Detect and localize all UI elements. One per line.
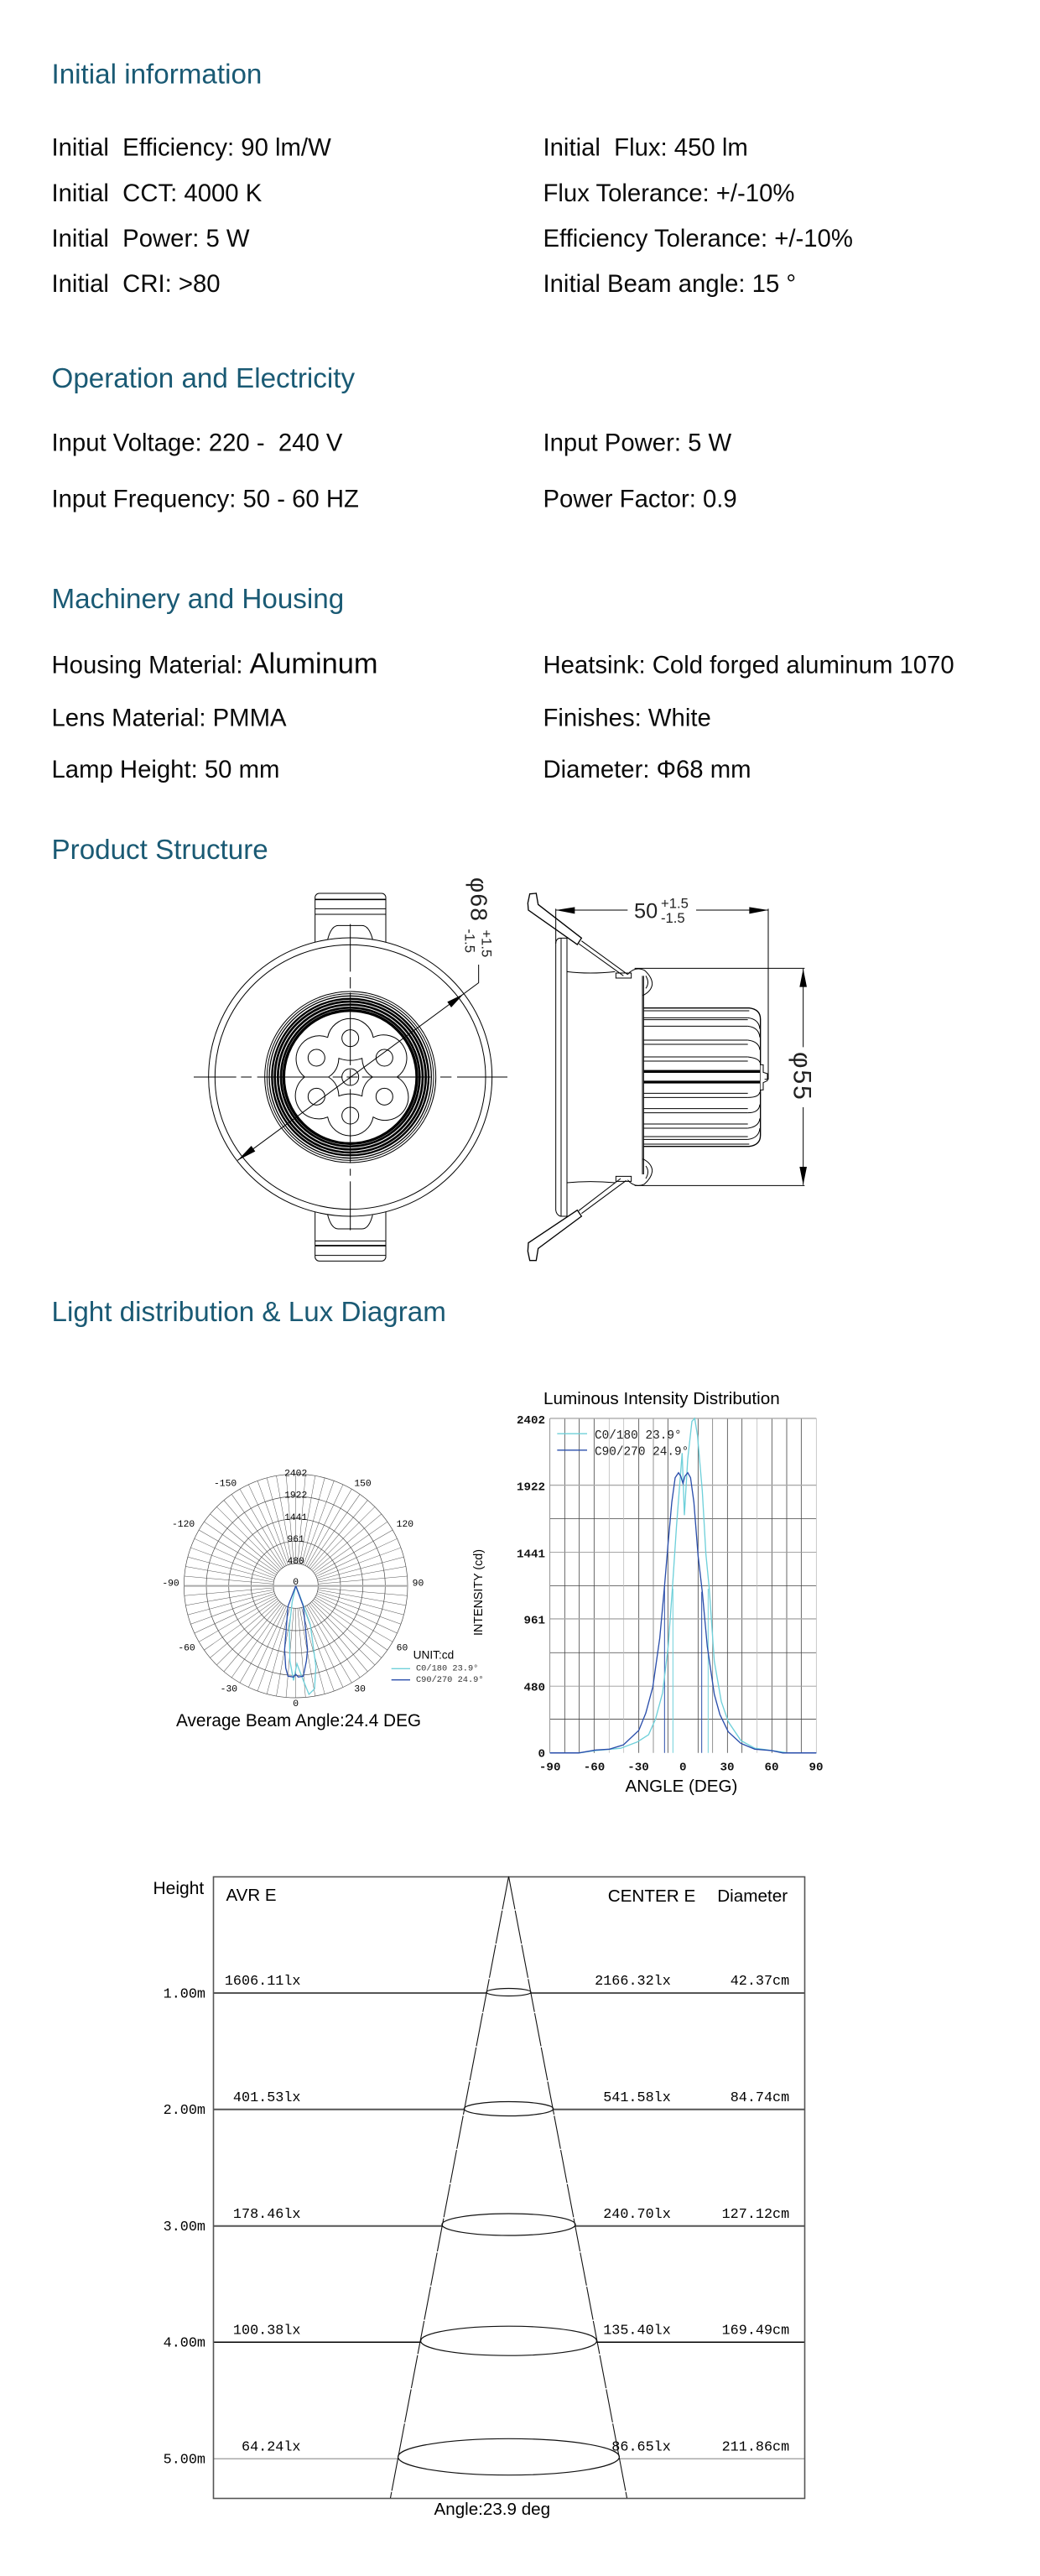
heading: light distribution and lux diagram: Light distribution & Lux Diagram	[52, 1297, 446, 1328]
frame	[213, 1877, 805, 2498]
row 4.00m	[164, 2324, 789, 2351]
row 3.00m: 178.46lx	[233, 2207, 300, 2223]
scale labels: 1922	[284, 1491, 307, 1501]
diameter dimension	[635, 968, 816, 1185]
y tick labels: 2402	[517, 1414, 545, 1428]
y tick labels: 480	[523, 1682, 545, 1695]
row 5.00m: 86.65lx	[611, 2440, 671, 2456]
row 5.00m: 64.24lx	[242, 2440, 300, 2456]
y tick labels: 961	[523, 1614, 545, 1627]
scale labels: 2402	[284, 1469, 307, 1479]
row 2.00m: 401.53lx	[233, 2090, 300, 2106]
panel: machinery and housing	[52, 584, 954, 783]
legend lines	[557, 1432, 587, 1435]
LED circles	[308, 1030, 393, 1124]
x tick labels: 0	[679, 1761, 687, 1774]
heading: machinery and housing: Machinery and Housing	[52, 584, 344, 615]
row 1.00m	[164, 1974, 789, 2002]
angle labels: -120	[172, 1520, 195, 1530]
x tick labels: 30	[720, 1761, 735, 1774]
spec list left column	[52, 134, 331, 298]
electrical specs left column	[52, 429, 359, 513]
height dimension: +1.5	[661, 896, 689, 912]
legend labels	[595, 1429, 689, 1460]
dimension label: +1.5	[479, 929, 495, 957]
angle labels: -90	[162, 1579, 179, 1590]
row 3.00m: 240.70lx	[603, 2207, 671, 2223]
column headers: CENTER E	[608, 1886, 695, 1906]
row 2.00m	[164, 2090, 789, 2119]
row 5.00m: 5.00m	[164, 2452, 205, 2468]
x tick labels: 90	[809, 1761, 824, 1774]
height dimension: -1.5	[661, 910, 685, 926]
panel: operation and electricity	[52, 363, 737, 513]
height dimension	[556, 896, 768, 1080]
angle labels: 0	[293, 1699, 299, 1710]
angle labels: 30	[354, 1685, 366, 1695]
cartesian luminous intensity chart	[517, 1389, 824, 1796]
dimension label	[462, 877, 495, 957]
scale labels: 1441	[284, 1513, 307, 1523]
polar legend	[392, 1649, 484, 1685]
spec list right column: Initial Flux: 450 lm	[543, 134, 748, 161]
x axis title: ANGLE (DEG)	[626, 1777, 737, 1796]
lux diagram	[153, 1876, 805, 2519]
spec list left column: Initial CCT: 4000 K	[52, 180, 263, 207]
polar intensity chart	[162, 1469, 484, 1710]
caption: beam angle: Angle:23.9 deg	[434, 2500, 550, 2519]
row 1.00m: 1.00m	[164, 1986, 205, 2002]
plot area	[550, 1418, 816, 1753]
scale labels: 961	[287, 1535, 304, 1545]
column headers	[153, 1879, 788, 1906]
angle labels: 60	[397, 1643, 408, 1653]
spec list right column: Efficiency Tolerance: +/-10%	[543, 225, 853, 252]
row 4.00m: 100.38lx	[233, 2324, 300, 2339]
height dimension: 50	[634, 899, 658, 923]
row 3.00m: 3.00m	[164, 2220, 205, 2235]
six-lobed lens	[295, 1018, 408, 1136]
scale labels	[284, 1469, 307, 1588]
y tick labels: 0	[538, 1748, 545, 1762]
spec list left column: Initial Efficiency: 90 lm/W	[52, 134, 331, 161]
front flange	[556, 938, 567, 1216]
angle labels: 120	[397, 1520, 413, 1530]
row 4.00m: 135.40lx	[603, 2324, 671, 2339]
legend labels: C0/180 23.9°	[595, 1429, 682, 1443]
y-axis label: intensity: INTENSITY (cd)	[472, 1549, 486, 1636]
column headers: AVR E	[226, 1886, 277, 1905]
row 1.00m: 1606.11lx	[225, 1974, 300, 1990]
row 1.00m: 2166.32lx	[595, 1974, 671, 1990]
y tick labels: 1441	[517, 1548, 545, 1561]
x tick labels	[539, 1761, 824, 1774]
spec list right column: Initial Beam angle: 15 °	[543, 270, 796, 298]
housing specs right column: Finishes: White	[543, 705, 711, 731]
heatsink fins	[644, 1008, 767, 1147]
angle labels: -30	[221, 1685, 237, 1695]
technical drawing: side view	[528, 893, 816, 1261]
row 3.00m	[164, 2207, 789, 2235]
intensity curve C90/270	[284, 1586, 308, 1677]
diameter dimension: φ55	[788, 1052, 816, 1101]
dimension label: -1.5	[462, 929, 478, 953]
spec list right column: Flux Tolerance: +/-10%	[543, 180, 794, 207]
dimension label: φ68	[466, 877, 492, 922]
mounting tab top	[315, 893, 386, 946]
intensity curve C0/180	[289, 1586, 316, 1694]
row 2.00m: 84.74cm	[731, 2090, 789, 2106]
horizontal axis	[184, 1584, 408, 1589]
polar legend: UNIT:cd	[413, 1649, 454, 1662]
central star	[329, 1059, 372, 1096]
housing specs left column: Lamp Height: 50 mm	[52, 756, 279, 783]
x tick labels: 60	[764, 1761, 779, 1774]
x tick labels: -90	[539, 1761, 560, 1774]
polar legend: C90/270 24.9°	[416, 1675, 484, 1685]
electrical specs right column: Power Factor: 0.9	[543, 485, 737, 513]
radial spokes	[185, 1474, 407, 1698]
bottom spring clip	[528, 1179, 627, 1261]
concentric reflector rings	[265, 991, 436, 1163]
beam markers	[664, 1586, 708, 1753]
housing specs left column	[52, 648, 378, 783]
row 5.00m: 211.86cm	[722, 2440, 789, 2456]
beam spot ellipses	[398, 1988, 619, 2475]
outer rim circles	[209, 938, 492, 1216]
column headers: Diameter	[717, 1886, 788, 1906]
spec list left column: Initial CRI: >80	[52, 270, 221, 298]
scale labels: 480	[287, 1557, 304, 1567]
spec list left column: Initial Power: 5 W	[52, 225, 250, 252]
row 1.00m: 42.37cm	[731, 1974, 789, 1990]
curve C90/270	[550, 1473, 816, 1753]
electrical specs left column: Input Frequency: 50 - 60 HZ	[52, 485, 359, 513]
x tick labels: -60	[584, 1761, 605, 1774]
angle labels	[162, 1480, 424, 1710]
y tick labels	[517, 1414, 545, 1762]
caption: average beam angle: Average Beam Angle:24.4 DEG	[176, 1711, 421, 1730]
electrical specs left column: Input Voltage: 220 - 240 V	[52, 429, 343, 456]
center lines	[194, 924, 507, 1231]
housing specs left column: Lens Material: PMMA	[52, 705, 287, 731]
heading: initial information: Initial information	[52, 59, 262, 91]
curve C0/180	[550, 1418, 816, 1753]
row 3.00m: 127.12cm	[722, 2207, 789, 2223]
housing specs left column: Housing Material: Aluminum	[52, 648, 378, 679]
concentric rings	[184, 1474, 408, 1698]
electrical specs right column	[543, 429, 737, 513]
beam cone	[391, 1876, 627, 2498]
column headers: Height	[153, 1879, 204, 1898]
x tick labels: -30	[627, 1761, 649, 1774]
angle labels: 90	[413, 1579, 424, 1590]
row 5.00m	[164, 2440, 789, 2468]
housing specs right column: Diameter: Φ68 mm	[543, 756, 751, 783]
row 2.00m: 2.00m	[164, 2103, 205, 2119]
panel: initial information	[52, 59, 853, 298]
top spring clip	[528, 893, 627, 976]
clip arches	[328, 925, 372, 1229]
housing body	[567, 969, 653, 1185]
technical drawing: front view	[194, 877, 507, 1261]
scale labels: 0	[293, 1578, 299, 1588]
row 2.00m: 541.58lx	[603, 2090, 671, 2106]
heading: operation and electricity: Operation and Electricity	[52, 363, 355, 394]
row 4.00m: 169.49cm	[722, 2324, 789, 2339]
housing specs right column	[543, 651, 954, 783]
spec list right column	[543, 134, 853, 298]
grid lines	[550, 1418, 816, 1753]
angle labels: -60	[178, 1643, 195, 1653]
heading: product structure: Product Structure	[52, 835, 268, 866]
angle labels: -150	[214, 1480, 237, 1490]
row 4.00m: 4.00m	[164, 2335, 205, 2351]
legend labels: C90/270 24.9°	[595, 1446, 689, 1460]
diameter dimension arrow	[237, 965, 479, 1160]
housing specs right column: Heatsink: Cold forged aluminum 1070	[543, 651, 954, 679]
y tick labels: 1922	[517, 1481, 545, 1494]
angle labels: 150	[354, 1480, 372, 1490]
electrical specs right column: Input Power: 5 W	[543, 429, 732, 456]
mounting tab bottom	[315, 1208, 386, 1261]
polar legend: C0/180 23.9°	[416, 1664, 478, 1674]
horizontal height lines	[213, 1993, 805, 2459]
chart title: Luminous Intensity Distribution	[543, 1389, 780, 1408]
